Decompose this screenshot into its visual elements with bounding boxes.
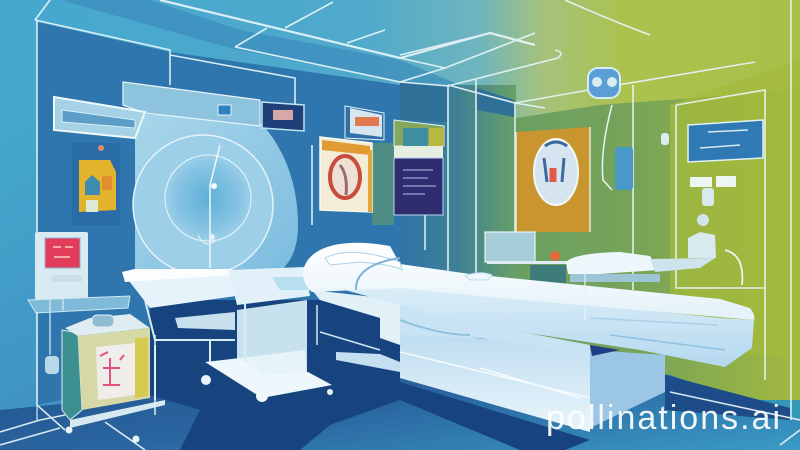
dark info poster [394, 120, 444, 250]
MRI scanner [54, 82, 298, 275]
mattress top [303, 243, 754, 320]
small wall displays [218, 102, 384, 140]
left monitor [28, 232, 130, 420]
cart with chart [62, 314, 165, 442]
brain poster [516, 127, 590, 232]
ceiling [0, 0, 800, 120]
scanner housing [135, 113, 298, 272]
left back wall [37, 22, 400, 405]
ceiling device and hanging tube [588, 68, 669, 190]
green back wall [516, 90, 800, 400]
right wall screen [688, 120, 763, 162]
table extension [228, 267, 310, 305]
dark strip behind bed right [665, 375, 790, 420]
table column [237, 300, 307, 378]
right wall equipment [688, 176, 742, 285]
table base [205, 358, 332, 398]
pillow [325, 252, 402, 270]
scanner top unit [123, 82, 260, 126]
scanner side unit [54, 97, 145, 138]
main patient bed [303, 243, 754, 432]
scanner table left [122, 267, 333, 402]
green panel beside poster [372, 143, 394, 225]
bed under tray [400, 305, 590, 355]
table top [122, 269, 236, 308]
bed base right side [590, 350, 665, 428]
right green wall glow [670, 60, 800, 360]
dark ceiling corner right [477, 88, 514, 117]
yellow left poster [72, 143, 120, 225]
back room bed [485, 232, 715, 285]
bed side rail [336, 352, 400, 372]
scanner bore [165, 155, 251, 241]
floor [0, 330, 800, 450]
mattress side [305, 285, 754, 367]
foot section under pillow [312, 290, 400, 345]
watermark: pollinations.ai [546, 399, 780, 437]
anatomy poster [320, 137, 372, 212]
bed base [400, 330, 590, 432]
centre wall [400, 85, 516, 325]
under table rails [145, 300, 245, 400]
dark ceiling corner [400, 82, 447, 122]
ceiling shadow band [60, 0, 460, 85]
scanner ring [133, 135, 273, 275]
dark floor under tables [150, 300, 590, 450]
